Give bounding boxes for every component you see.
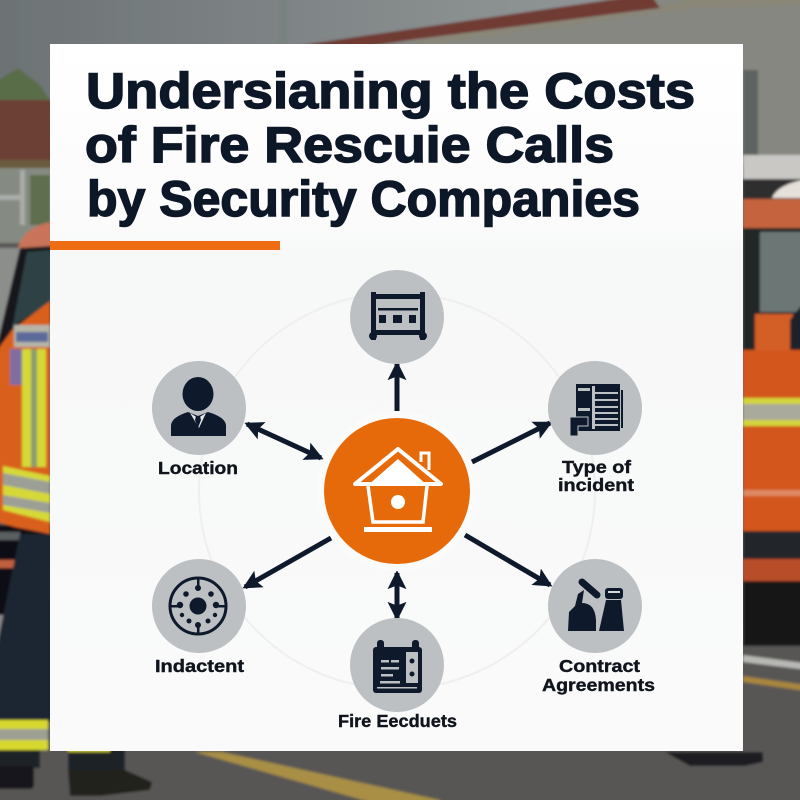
firefighter legs and boots bbox=[0, 534, 60, 722]
arrow: center to contract agreements bbox=[465, 535, 550, 585]
icon: document bbox=[570, 384, 623, 436]
icon: target dial bbox=[169, 577, 227, 635]
node: location bbox=[152, 361, 246, 478]
arrow: center to location bbox=[247, 424, 321, 458]
node: type of incident bbox=[548, 361, 642, 495]
label: fire eecduets: Fire Eecduets bbox=[338, 711, 457, 731]
left building and tree bbox=[0, 68, 50, 100]
label: type of incident: Type of bbox=[562, 457, 631, 477]
arrow: center to type of incident bbox=[472, 423, 550, 462]
label: indactent: Indactent bbox=[155, 656, 244, 676]
firefighter vest bbox=[0, 301, 50, 534]
node: fire eecduets bbox=[338, 618, 457, 731]
title: by Security Companies bbox=[87, 171, 640, 227]
road marking bbox=[195, 752, 440, 800]
truck right bbox=[743, 155, 800, 179]
title: Undersianing the Costs bbox=[86, 63, 695, 119]
label: contract agreements: Contract bbox=[559, 656, 640, 676]
label: contract agreements bbox=[542, 656, 655, 695]
faint orbit ring bbox=[199, 293, 595, 689]
icon: control unit bbox=[373, 640, 422, 693]
arrow: center to indactent bbox=[245, 538, 331, 587]
node: indactent bbox=[152, 559, 246, 676]
arrow: center to top bbox=[394, 364, 400, 411]
label: type of incident bbox=[558, 457, 634, 495]
title: of Fire Rescuie Calls bbox=[85, 117, 614, 173]
arrows bbox=[245, 364, 550, 618]
label: location: Location bbox=[158, 458, 238, 478]
truck left bbox=[0, 248, 20, 398]
label: contract agreements: Agreements bbox=[542, 675, 655, 695]
arrow: center to fire eecduets bbox=[394, 573, 400, 618]
icon: person in suit bbox=[171, 377, 226, 436]
right building bbox=[290, 0, 800, 165]
node: contract agreements bbox=[542, 559, 655, 695]
white content panel bbox=[50, 44, 743, 751]
center hub: house icon bbox=[317, 411, 477, 571]
icon: panel frame bbox=[369, 292, 427, 340]
title accent bar bbox=[50, 241, 280, 250]
label: type of incident: incident bbox=[558, 475, 634, 495]
node: top (unlabelled) bbox=[350, 270, 444, 364]
icon: silhouettes bbox=[568, 582, 624, 631]
title bbox=[85, 63, 695, 227]
